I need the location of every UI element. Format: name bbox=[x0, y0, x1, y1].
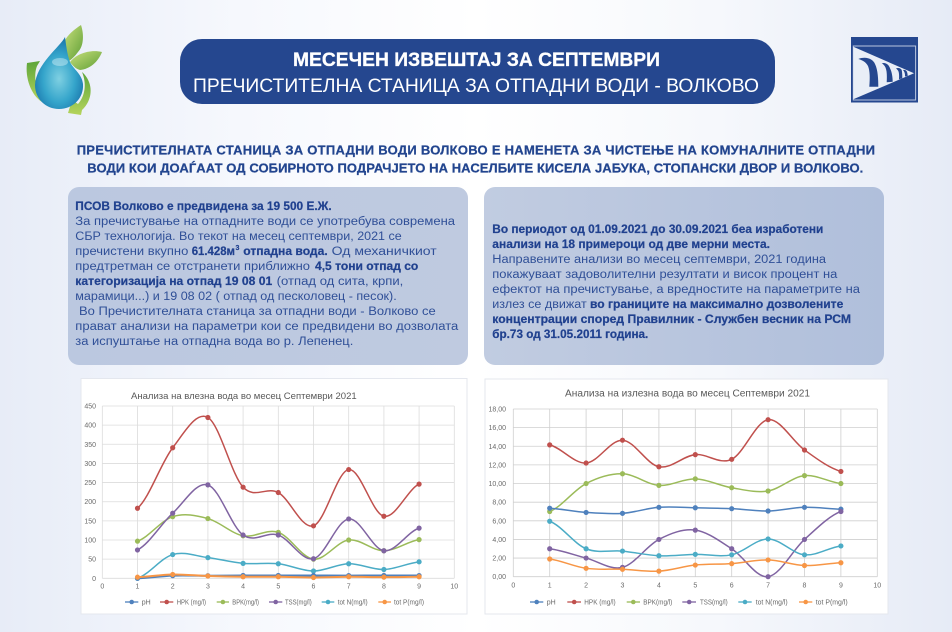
x axis labels: 8 bbox=[803, 582, 807, 590]
panel: analysis results: Во периодот од 01.09.2021 до 30.09.2021 беа изработени bbox=[492, 224, 823, 236]
series: HPK bbox=[137, 416, 419, 526]
y axis labels: 450 bbox=[84, 404, 96, 410]
chart: effluent water bbox=[485, 379, 888, 614]
x axis labels bbox=[100, 583, 458, 590]
x axis labels: 8 bbox=[382, 583, 386, 590]
y axis labels: 10,00 bbox=[488, 481, 506, 488]
legend: TSS(mg/l) bbox=[700, 599, 728, 606]
heading text: ВОДИ КОИ ДОАЃААТ ОД СОБИРНОТО ПОДРАЧЈЕТО НА НАСЕЛБИТЕ КИСЕЛА ЈАБУКА, СТОПАНСКИ ДВОР И ВОЛКОВО. bbox=[87, 160, 863, 175]
y axis labels: 12,00 bbox=[488, 462, 506, 469]
x axis labels: 7 bbox=[766, 582, 770, 590]
x axis labels: 3 bbox=[621, 582, 625, 590]
icon: company logo bbox=[851, 37, 918, 102]
icon: water drop with leaves bbox=[27, 25, 102, 115]
x axis labels: 2 bbox=[171, 583, 175, 590]
y axis labels: 250 bbox=[84, 480, 96, 487]
series: pH bbox=[137, 575, 419, 578]
y axis labels: 350 bbox=[84, 442, 96, 449]
y axis labels: 300 bbox=[84, 461, 96, 468]
x axis labels: 6 bbox=[730, 582, 734, 590]
panel: analysis results: ефектот на пречистување, а вредностите на параметрите на bbox=[492, 284, 861, 296]
x axis labels: 4 bbox=[657, 582, 661, 590]
chart: influent water bbox=[81, 378, 467, 614]
x axis labels: 0 bbox=[100, 583, 104, 590]
panel: plant description: 61.428м bbox=[192, 246, 235, 258]
title line 2: ПРЕЧИСТИТЕЛНА СТАНИЦА ЗА ОТПАДНИ ВОДИ - ВОЛКОВО bbox=[193, 75, 759, 97]
panel: plant description: пречистени вкупно bbox=[75, 246, 188, 258]
series: pH bbox=[550, 507, 841, 514]
y axis labels bbox=[84, 404, 96, 583]
series: tot P bbox=[137, 574, 419, 578]
panel: analysis results: излез се движат bbox=[492, 299, 587, 311]
heading text bbox=[77, 142, 875, 175]
legend: BPK(mg/l) bbox=[643, 599, 672, 606]
panel: plant description bbox=[68, 187, 468, 365]
title banner bbox=[180, 39, 775, 104]
panel: plant description: ПСОВ Волково е предвидена за 19 500 Е.Ж. bbox=[75, 201, 332, 213]
panel: plant description: За пречистување на отпадните води се употребува современа bbox=[75, 216, 456, 228]
panel: analysis results: бр.73 од 31.05.2011 година. bbox=[492, 329, 648, 341]
y axis labels: 50 bbox=[88, 557, 96, 564]
panel: plant description: марамици...) и 19 08 02 ( отпад од песколовец - песок). bbox=[75, 291, 397, 303]
y axis labels bbox=[488, 406, 506, 581]
x axis labels: 3 bbox=[206, 583, 210, 590]
legend: pH bbox=[547, 599, 556, 606]
x axis labels: 5 bbox=[693, 582, 697, 590]
y axis labels: 400 bbox=[84, 423, 96, 430]
x axis labels: 2 bbox=[584, 582, 588, 590]
x axis labels: 5 bbox=[276, 583, 280, 590]
legend bbox=[125, 599, 424, 606]
legend: tot P(mg/l) bbox=[816, 599, 848, 606]
legend: TSS(mg/l) bbox=[285, 599, 312, 606]
x axis labels: 7 bbox=[347, 583, 351, 590]
legend: tot N(mg/l) bbox=[756, 599, 788, 606]
panel: plant description: отпадна вода. bbox=[243, 246, 328, 258]
plot area bbox=[102, 406, 454, 578]
panel: plant description: за испуштање на отпадна вода во р. Лепенец. bbox=[75, 336, 353, 348]
series: BPK bbox=[550, 474, 841, 511]
series: tot N bbox=[550, 521, 841, 556]
series: BPK bbox=[137, 515, 419, 559]
y axis labels: 18,00 bbox=[488, 406, 506, 414]
series: tot P bbox=[550, 559, 841, 571]
y axis labels: 4,00 bbox=[492, 537, 506, 544]
panel: plant description: (отпад од сита, крпи, bbox=[277, 276, 403, 288]
x axis labels: 9 bbox=[839, 582, 843, 590]
x axis labels: 1 bbox=[548, 582, 552, 590]
y axis labels: 8,00 bbox=[492, 500, 506, 507]
panel: analysis results: Направените анализи во месец септември, 2021 година bbox=[492, 254, 827, 266]
panel: plant description: предтретман се отстранети приближно bbox=[75, 261, 310, 273]
series: HPK bbox=[550, 420, 841, 471]
x axis labels: 10 bbox=[450, 583, 458, 590]
legend: pH bbox=[142, 599, 151, 606]
panel: plant description: Од механичкиот bbox=[332, 246, 438, 258]
y axis labels: 14,00 bbox=[488, 444, 506, 451]
plot area bbox=[513, 409, 877, 577]
x axis labels: 0 bbox=[511, 582, 515, 590]
panel: analysis results: во границите на максимално дозволените bbox=[590, 299, 843, 311]
x axis labels: 6 bbox=[312, 583, 316, 590]
y axis labels: 6,00 bbox=[492, 518, 506, 525]
x axis labels: 1 bbox=[136, 583, 140, 590]
y axis labels: 0,00 bbox=[492, 574, 506, 581]
series: tot N bbox=[137, 553, 419, 578]
x axis labels: 9 bbox=[417, 583, 421, 590]
panel: analysis results: покажуваат задоволителни резултати и висок процент на bbox=[492, 269, 838, 281]
legend: tot P(mg/l) bbox=[394, 599, 424, 606]
y axis labels: 150 bbox=[84, 518, 96, 525]
y axis labels: 200 bbox=[84, 499, 96, 506]
panel: analysis results: концентрации според Правилник - Службен весник на РСМ bbox=[492, 314, 851, 326]
series: TSS bbox=[550, 511, 841, 577]
panel: plant description: прават анализи на параметри кои се предвидени во дозволата bbox=[75, 321, 459, 333]
x axis labels: 10 bbox=[873, 582, 881, 590]
y axis labels: 2,00 bbox=[492, 556, 506, 563]
title line 1: МЕСЕЧЕН ИЗВЕШТАЈ ЗА СЕПТЕМВРИ bbox=[293, 49, 660, 71]
panel: analysis results bbox=[484, 187, 884, 365]
panel: plant description: категоризација на отпад 19 08 01 bbox=[75, 276, 273, 288]
panel: analysis results: анализи на 18 примероци од две мерни места. bbox=[492, 239, 770, 251]
legend: tot N(mg/l) bbox=[338, 599, 368, 606]
panel: plant description: 3 bbox=[236, 245, 240, 252]
panel: plant description: СБР технологија. Во текот на месец септември, 2021 се bbox=[75, 231, 402, 243]
legend bbox=[530, 599, 848, 606]
x axis labels bbox=[511, 582, 881, 590]
x axis labels: 4 bbox=[241, 583, 245, 590]
legend: HPK (mg/l) bbox=[177, 599, 206, 606]
y axis labels: 16,00 bbox=[488, 425, 506, 432]
y axis labels: 0 bbox=[92, 576, 96, 583]
heading text: ПРЕЧИСТИТЕЛНАТА СТАНИЦА ЗА ОТПАДНИ ВОДИ ВОЛКОВО Е НАМЕНЕТА ЗА ЧИСТЕЊЕ НА КОМУНАЛНИТЕ ОТПАДНИ bbox=[77, 142, 875, 157]
panel: plant description: 4,5 тони отпад со bbox=[315, 261, 418, 273]
series: TSS bbox=[137, 484, 419, 559]
legend: HPK (mg/l) bbox=[584, 599, 616, 606]
y axis labels: 100 bbox=[84, 538, 96, 544]
chart title: Анализа на влезна вода во месец Септември 2021 bbox=[131, 391, 357, 402]
legend: BPK(mg/l) bbox=[232, 599, 259, 606]
panel: plant description: Во Пречистителната станица за отпадни води - Волково се bbox=[79, 306, 436, 318]
chart title: Анализа на излезна вода во месец Септември 2021 bbox=[565, 389, 810, 400]
